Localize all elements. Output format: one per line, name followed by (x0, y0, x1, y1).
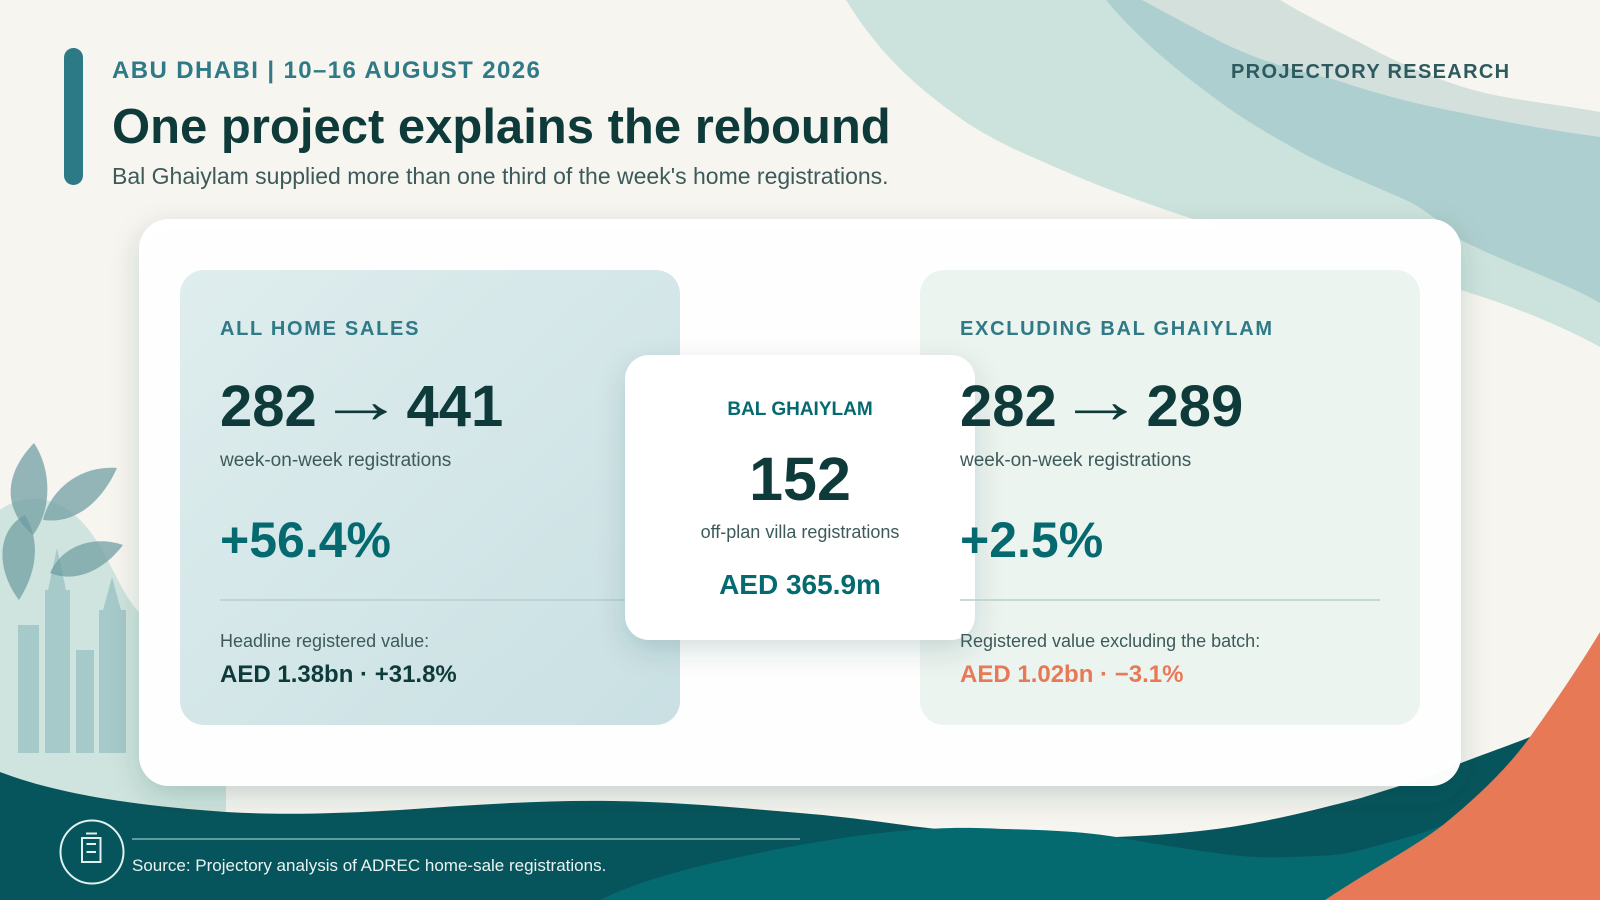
source note: Source: Projectory analysis of ADREC home-sale registrations. (132, 856, 606, 875)
brand label: PROJECTORY RESEARCH (1231, 61, 1510, 83)
header accent bar (64, 48, 83, 185)
coral corner wave (1325, 632, 1600, 900)
registrations after: 289 (1146, 374, 1243, 439)
background: cream corner above bands (1280, 0, 1600, 112)
panel content: excluding bal ghaiylam (959, 318, 1380, 688)
value label: Registered value excluding the batch: (960, 631, 1260, 651)
subtitle: Bal Ghaiylam supplied more than one third of the week's home registrations. (112, 163, 889, 189)
registrations after: 441 (406, 374, 503, 439)
footer divider (132, 838, 800, 840)
header eyebrow: ABU DHABI | 10–16 AUGUST 2026 (112, 57, 541, 84)
footer: source icon (60, 820, 124, 884)
background: top-right grey band (1142, 0, 1600, 137)
divider (960, 599, 1380, 601)
divider (220, 599, 640, 601)
centre label: BAL GHAIYLAM (727, 399, 873, 420)
background: top-right teal band (1106, 0, 1600, 303)
panel background: excluding bal ghaiylam (920, 270, 1420, 725)
value label: Headline registered value: (220, 631, 429, 651)
value figure: AED 1.38bn · +31.8% (220, 661, 457, 688)
background: mint arch behind skyline (0, 499, 226, 830)
dark teal wave (0, 700, 1600, 900)
registrations before: 282 (960, 374, 1057, 439)
centre card: bal ghaiylam (625, 355, 975, 640)
title: One project explains the rebound (112, 100, 891, 154)
registrations caption: week-on-week registrations (219, 450, 451, 471)
background: top-right mint band (846, 0, 1600, 347)
main white card (139, 219, 1461, 786)
percent change: +2.5% (960, 512, 1103, 568)
centre value: AED 365.9m (719, 569, 881, 600)
registrations before: 282 (220, 374, 317, 439)
centre caption: off-plan villa registrations (701, 522, 899, 542)
panel label: ALL HOME SALES (220, 318, 420, 340)
mid teal wave (600, 790, 1600, 900)
skyline illustration (18, 548, 126, 753)
value figure: AED 1.02bn · −3.1% (960, 661, 1183, 688)
arrow: → (317, 366, 405, 437)
panel: all home sales (180, 270, 680, 725)
panel label: EXCLUDING BAL GHAIYLAM (960, 318, 1274, 340)
centre figure: 152 (749, 445, 851, 513)
registrations caption: week-on-week registrations (959, 450, 1191, 471)
arrow: → (1057, 366, 1145, 437)
percent change: +56.4% (220, 512, 391, 568)
leaves illustration (2, 443, 123, 600)
